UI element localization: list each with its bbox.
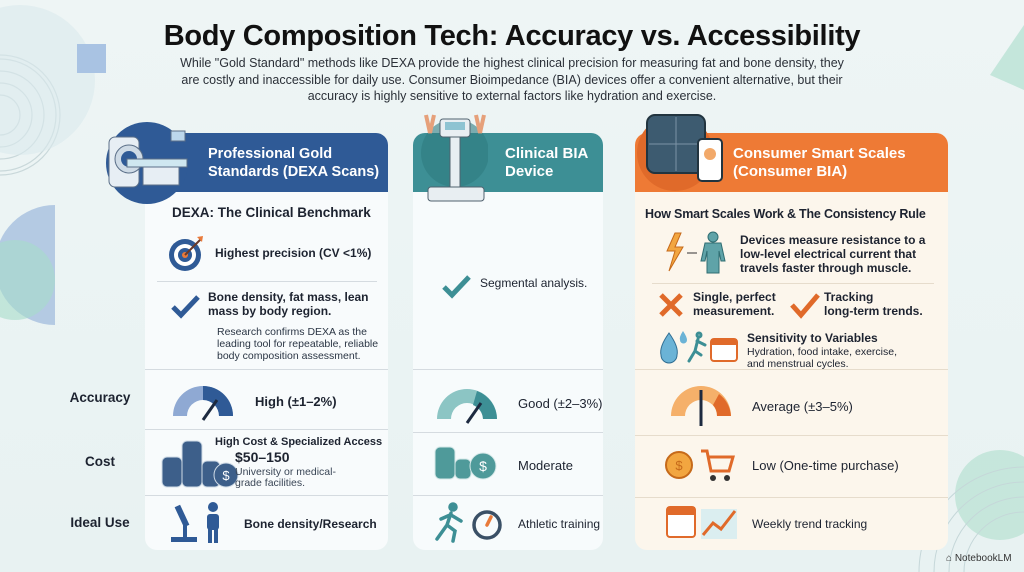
text: high accuracy: High (±1–2%) (255, 394, 337, 409)
row labels (70, 390, 130, 530)
icon: check (171, 295, 200, 319)
icon: runner stopwatch (435, 502, 502, 543)
header: BIA (413, 133, 603, 192)
icon: target (169, 236, 203, 271)
subtitle: While "Gold Standard" methods like DEXA provide the highest clinical precision for measuring fat and bone density, they are costly and inaccessible for daily use. Consumer Bioimpedance (BIA) devices offer a convenient alternative, but their accuracy is highly sensitive to external factors like hydration and exercise. (180, 56, 844, 103)
header: DEXA (145, 133, 388, 192)
text: devices measure (740, 233, 926, 275)
header: BIA: Clinical BIA (505, 145, 588, 162)
icon: DEXA scanner (106, 122, 188, 204)
text: bone density (208, 290, 368, 318)
text: devices measure: low-level electrical current that (740, 247, 916, 261)
heading: DEXA benchmark: DEXA: The Clinical Benchmark (172, 205, 371, 220)
panel: DEXA (145, 133, 388, 550)
label: ideal use: Ideal Use (70, 515, 130, 530)
header: Consumer (635, 133, 948, 192)
icon: coins: $ (479, 458, 487, 474)
gauge: average (671, 386, 731, 426)
icon: microscope person (171, 502, 219, 543)
text: athletic: Athletic training (518, 517, 600, 531)
icon: coin cart (665, 450, 735, 481)
panel: Consumer: and menstrual cycles. (747, 358, 849, 370)
icon: check (442, 275, 471, 299)
text: devices measure: travels faster through muscle. (740, 261, 911, 275)
icon: check (790, 293, 820, 319)
panel: Clinical BIA (413, 133, 603, 550)
gauge: good (437, 389, 497, 424)
icon: cross (659, 293, 683, 317)
panel: DEXA: University or medical- (235, 466, 336, 478)
text: tracking (824, 290, 923, 318)
text: single: Single, perfect (693, 290, 776, 304)
text: average accuracy: Average (±3–5%) (752, 399, 853, 414)
heading: how smart scales work: How Smart Scales Work & The Consistency Rule (645, 207, 926, 221)
text: ideal use: Bone density/Research (244, 517, 377, 531)
text: sensitivity: Sensitivity to Variables (747, 331, 878, 345)
text: weekly: Weekly trend tracking (752, 517, 867, 531)
header: Consumer: (Consumer BIA) (733, 163, 847, 180)
text: devices measure: Devices measure resistance to a (740, 233, 925, 247)
icon: coin cart: $ (675, 458, 683, 473)
text: single (693, 290, 776, 318)
header: DEXA: Professional Gold (208, 146, 332, 162)
text: bone density: mass by body region. (208, 304, 331, 318)
text: good accuracy: Good (±2–3%) (518, 396, 602, 411)
icon: calendar chart (666, 506, 737, 539)
text: research: Research confirms DEXA as the (217, 326, 367, 338)
text: highest precision: Highest precision (CV <1%) (215, 246, 371, 260)
icon: smart scale phone (637, 114, 723, 191)
text: low cost: Low (One-time purchase) (752, 458, 899, 473)
text: tracking: Tracking (824, 290, 873, 304)
panel: DEXA: $50–150 (235, 449, 290, 465)
icon: current body (666, 232, 726, 274)
text: moderate: Moderate (518, 458, 573, 473)
text: research: body composition assessment. (217, 350, 361, 362)
text: cost: High Cost & Specialized Access (215, 436, 382, 448)
text: bone density: Bone density, fat mass, lean (208, 290, 368, 304)
text: single: measurement. (693, 304, 774, 318)
icon: coins (162, 440, 238, 488)
icon: BIA device (421, 114, 488, 202)
logo: NotebookLM: ⌂ NotebookLM (946, 553, 1012, 564)
label: accuracy: Accuracy (70, 390, 130, 405)
text: research: leading tool for repeatable, reliable (217, 338, 378, 350)
text: research (217, 326, 378, 362)
header: BIA: Device (505, 163, 553, 180)
label: cost: Cost (85, 454, 115, 469)
icon: water runner calendar (660, 331, 738, 364)
title: Body Composition Tech: Accuracy vs. Accessibility (164, 20, 860, 52)
gauge: high (173, 386, 233, 421)
icon: coins: $ (222, 468, 230, 483)
panel: DEXA: grade facilities. (235, 477, 305, 489)
text: segmental: Segmental analysis. (480, 276, 587, 290)
panel: Consumer: Hydration, food intake, exercise, (747, 346, 897, 358)
header: Consumer: Consumer Smart Scales (733, 145, 906, 162)
panel: Consumer (635, 133, 948, 550)
text: tracking: long-term trends. (824, 304, 923, 318)
header: DEXA: Standards (DEXA Scans) (208, 164, 379, 180)
icon: coins (434, 446, 496, 480)
